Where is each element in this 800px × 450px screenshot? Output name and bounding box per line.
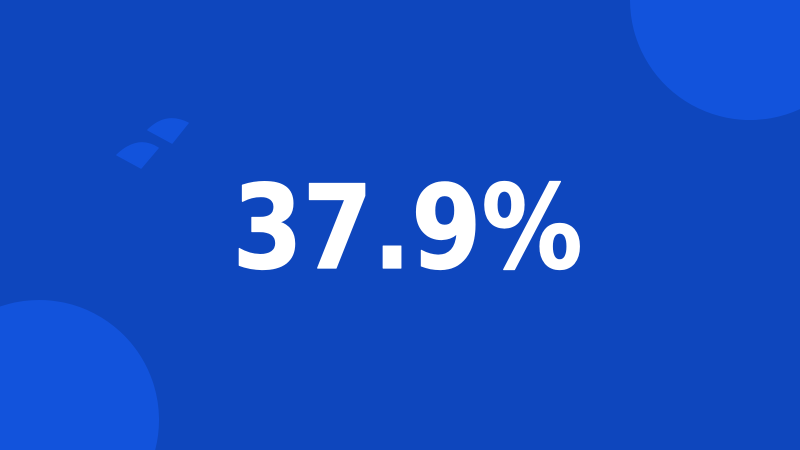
icon: lower fan [117,143,158,168]
decorative circle: top right [630,0,800,120]
headline statistic: 37.9% [232,160,583,296]
decorative circle: bottom left [0,300,159,450]
icon: logo fans [117,119,188,168]
icon: upper fan [148,119,188,143]
